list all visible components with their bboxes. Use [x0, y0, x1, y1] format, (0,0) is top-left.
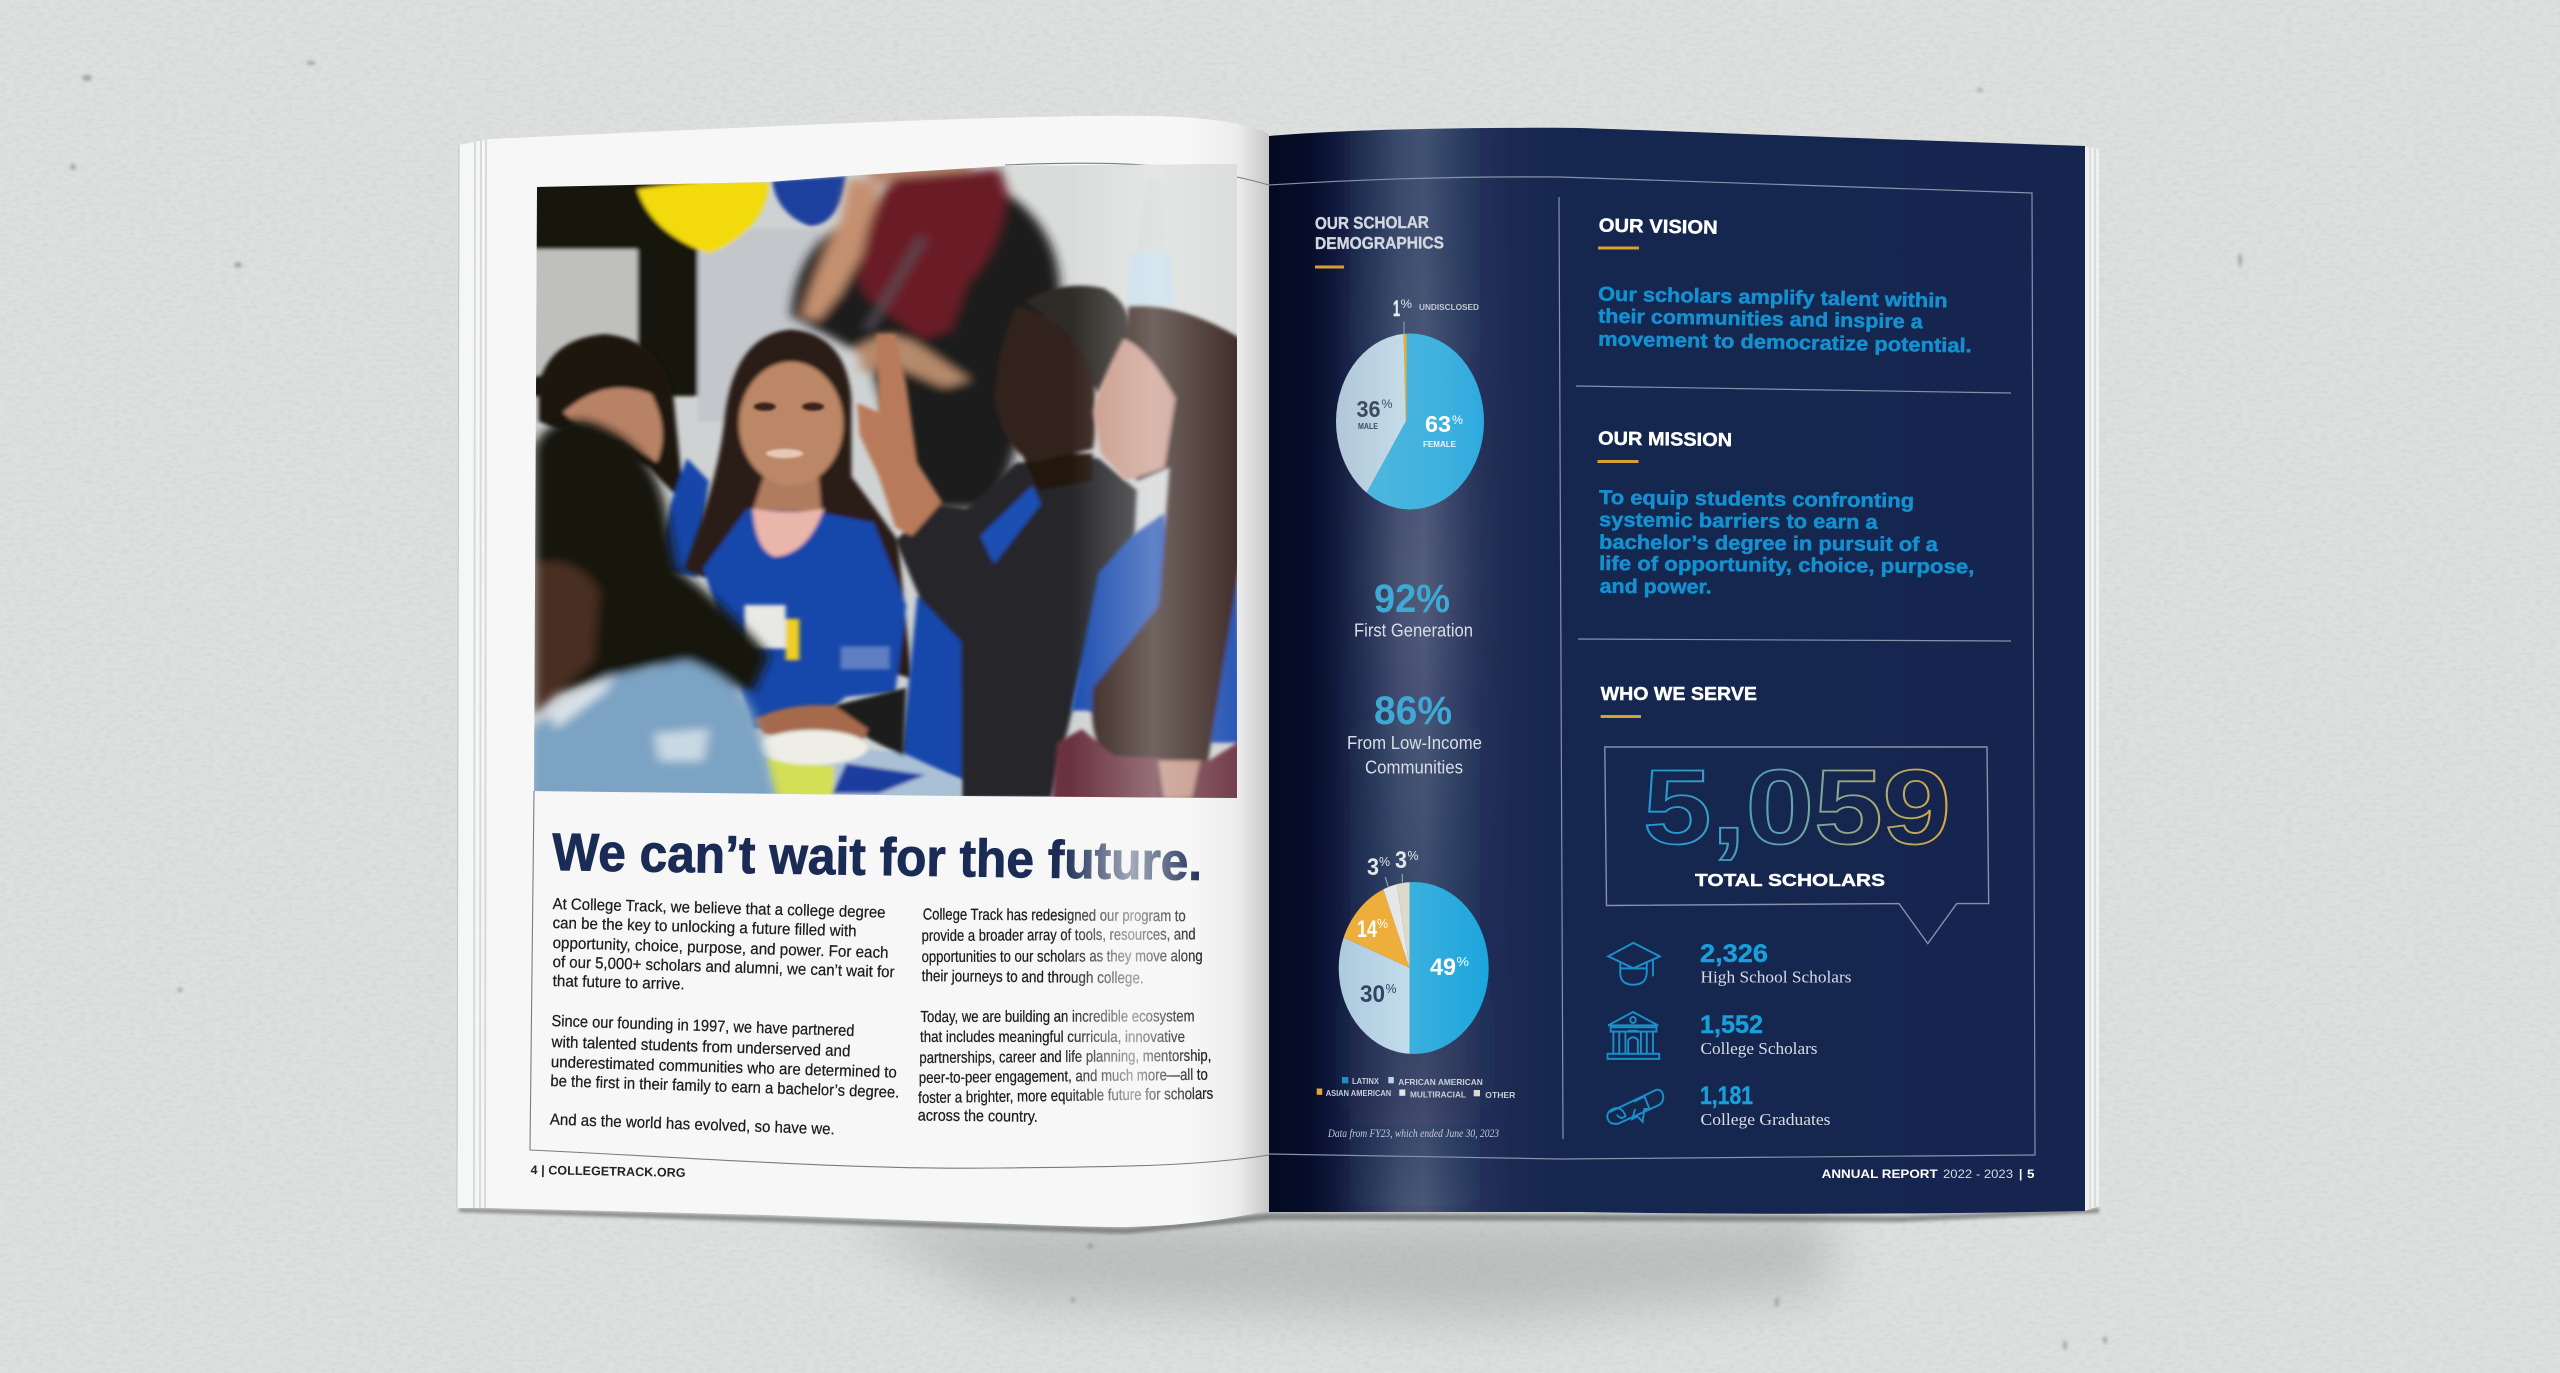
- text block: left column: [550, 896, 900, 1138]
- legend: LATINX: [1352, 1076, 1379, 1086]
- chart: ethnicity pie: 30: [1360, 981, 1385, 1008]
- stat: 92% first generation: 92%: [1374, 577, 1450, 621]
- text block: left column: underestimated communities who are determined to: [551, 1054, 897, 1082]
- stat: 86% low income: From Low-Income: [1347, 733, 1482, 753]
- stat: college scholars: [1700, 1011, 1818, 1058]
- section: our vision: [1598, 216, 1972, 357]
- central student: [684, 330, 912, 729]
- spine highlight falloff: [1350, 100, 1480, 1240]
- chart: ethnicity pie: %: [1379, 854, 1390, 869]
- chart: gender pie: 36: [1356, 396, 1380, 422]
- name tag and shirt print: [744, 605, 890, 669]
- text block: left column: that future to arrive.: [552, 973, 685, 993]
- legend: [1317, 1076, 1515, 1100]
- stat: 86% low income: [1347, 689, 1482, 778]
- stat: college graduates: 1,181: [1700, 1082, 1753, 1110]
- text block: right column: peer-to-peer engagement, and much more—all to: [919, 1067, 1208, 1087]
- text block: left column: with talented students from underserved and: [550, 1034, 851, 1060]
- section: our vision: Our scholars amplify talent within: [1598, 284, 1948, 312]
- central woman in black jacket: [857, 286, 1137, 798]
- page frame lines: [530, 163, 1269, 1168]
- panel: right page: [1269, 100, 2099, 1240]
- chart: ethnicity pie: %: [1408, 848, 1419, 863]
- callout: total scholars: 5,059: [1643, 748, 1951, 866]
- chart: ethnicity pie: [1320, 847, 1500, 1070]
- table, plate and hand: [753, 688, 961, 802]
- section: our mission: [1598, 429, 1974, 598]
- text block: left column: And as the world has evolved, so have we.: [550, 1112, 835, 1138]
- text block: left column: opportunity, choice, purpose, and power. For each: [552, 935, 889, 962]
- stat: high school scholars: [1700, 940, 1852, 986]
- chart: gender pie: MALE: [1358, 422, 1379, 431]
- stat: 86% low income: Communities: [1365, 758, 1463, 778]
- text block: left column: be the first in their family to earn a bachelor’s degree.: [550, 1073, 900, 1102]
- text block: right column: partnerships, career and life planning, mentorship,: [919, 1048, 1211, 1067]
- text block: right column: Today, we are building an incredible ecosystem: [920, 1008, 1195, 1026]
- footer: right page number: 5: [2027, 1167, 2035, 1181]
- column divider: [1559, 197, 1563, 1139]
- stat: college scholars: College Scholars: [1700, 1039, 1818, 1058]
- section: our mission: life of opportunity, choice, purpose,: [1599, 553, 1974, 578]
- text block: left column: At College Track, we believe that a college degree: [552, 896, 886, 922]
- chart: ethnicity pie: 14: [1357, 916, 1377, 943]
- foreground student: [531, 421, 777, 802]
- section: our mission: and power.: [1600, 576, 1712, 598]
- footer: left page number: 4 | COLLEGETRACK.ORG: [530, 1163, 686, 1180]
- legend: OTHER: [1485, 1090, 1515, 1100]
- chart: ethnicity pie: %: [1456, 954, 1469, 969]
- chart: gender pie: [1300, 296, 1520, 565]
- footer: right page number: ANNUAL REPORT: [1822, 1167, 1938, 1181]
- chart: ethnicity pie: 49: [1430, 954, 1456, 981]
- text block: left column: Since our founding in 1997, we have partnered: [551, 1013, 855, 1040]
- page sheet: [489, 116, 1269, 1227]
- text block: left column: of our 5,000+ scholars and alumni, we can’t wait for: [552, 954, 895, 981]
- callout: total scholars: TOTAL SCHOLARS: [1695, 870, 1885, 890]
- chart: gender pie: 63: [1425, 411, 1451, 437]
- chart: ethnicity pie: 3: [1367, 854, 1379, 881]
- section: our mission: OUR MISSION: [1598, 429, 1732, 451]
- text block: right column: [918, 907, 1213, 1126]
- horizontal dividers: [1576, 386, 2011, 641]
- shadow beneath magazine: [459, 1208, 2099, 1320]
- stat: 92% first generation: [1354, 577, 1473, 640]
- section: our mission: To equip students confronting: [1599, 487, 1914, 512]
- navy page sheet: [1269, 128, 2085, 1214]
- heading: our scholar demographics: OUR SCHOLAR: [1315, 213, 1429, 233]
- icon: college building: [1608, 1012, 1659, 1059]
- section: who we serve: [1601, 684, 1757, 718]
- icon: diploma scroll: [1607, 1090, 1663, 1124]
- text block: right column: foster a brighter, more equitable future for scholars: [918, 1086, 1213, 1107]
- central student facial features: [754, 403, 824, 458]
- heading: our scholar demographics: DEMOGRAPHICS: [1315, 233, 1444, 253]
- chart: ethnicity pie: 3: [1395, 847, 1407, 874]
- text block: right column: their journeys to and through college.: [922, 968, 1144, 987]
- section: our mission: systemic barriers to earn a: [1599, 509, 1879, 534]
- section: who we serve: WHO WE SERVE: [1601, 684, 1757, 704]
- heading: our scholar demographics: [1315, 213, 1444, 268]
- legend: AFRICAN AMERICAN: [1398, 1077, 1483, 1087]
- glossy sheen over left page text: [1060, 820, 1205, 1140]
- footer: right page number: 2022 - 2023: [1943, 1167, 2013, 1181]
- chart: gender pie: %: [1400, 297, 1412, 311]
- photo: students raising hand: [528, 144, 1246, 807]
- callout: total scholars: [1605, 747, 1989, 944]
- panel: left page: [457, 116, 1269, 1227]
- chart: gender pie: 1: [1393, 296, 1400, 321]
- page frame lines: [1269, 177, 2035, 1159]
- data note: Data from FY23, which ended June 30, 2023: [1327, 1126, 1499, 1140]
- legend: MULTIRACIAL: [1410, 1090, 1466, 1100]
- page edge stack: [457, 139, 490, 1208]
- text block: right column: College Track has redesigned our program to: [923, 907, 1186, 925]
- stat: college graduates: [1700, 1082, 1830, 1129]
- text block: right column: across the country.: [918, 1108, 1038, 1126]
- section: our vision: OUR VISION: [1599, 216, 1718, 239]
- icon: graduation cap: [1608, 943, 1660, 985]
- section: our vision: movement to democratize potential.: [1598, 329, 1972, 357]
- text block: right column: opportunities to our scholars as they move along: [922, 948, 1203, 966]
- chart: gender pie: FEMALE: [1423, 440, 1457, 449]
- chart: ethnicity pie: %: [1377, 916, 1388, 931]
- stat: high school scholars: 2,326: [1700, 940, 1768, 968]
- chart: ethnicity pie: %: [1386, 981, 1397, 996]
- stat: high school scholars: High School Scholars: [1700, 968, 1852, 986]
- chart: gender pie: %: [1452, 413, 1463, 427]
- stat: 92% first generation: First Generation: [1354, 620, 1473, 640]
- section: our mission: bachelor’s degree in pursuit of a: [1599, 532, 1939, 556]
- back-left student: [539, 334, 709, 577]
- footer: right page number: |: [2019, 1167, 2022, 1181]
- text block: left column: can be the key to unlocking a future filled with: [552, 915, 857, 940]
- text block: right column: that includes meaningful curricula, innovative: [920, 1029, 1185, 1046]
- footer: right page number: [1822, 1167, 2035, 1181]
- section: our vision: their communities and inspire a: [1598, 306, 1924, 333]
- heading: We can't wait for the future: We can’t wait for the future.: [552, 823, 1203, 892]
- stat: college scholars: 1,552: [1700, 1011, 1763, 1039]
- chart: gender pie: UNDISCLOSED: [1419, 302, 1479, 312]
- chart: gender pie: %: [1382, 397, 1393, 411]
- page edge stack: [2085, 146, 2099, 1211]
- text block: right column: provide a broader array of tools, resources, and: [922, 926, 1196, 945]
- right student: [1052, 306, 1241, 802]
- stat: college graduates: College Graduates: [1700, 1110, 1830, 1129]
- standing woman: [791, 144, 1060, 509]
- stat: 86% low income: 86%: [1374, 689, 1452, 733]
- legend: ASIAN AMERICAN: [1326, 1088, 1391, 1098]
- background specks: [70, 61, 2242, 1350]
